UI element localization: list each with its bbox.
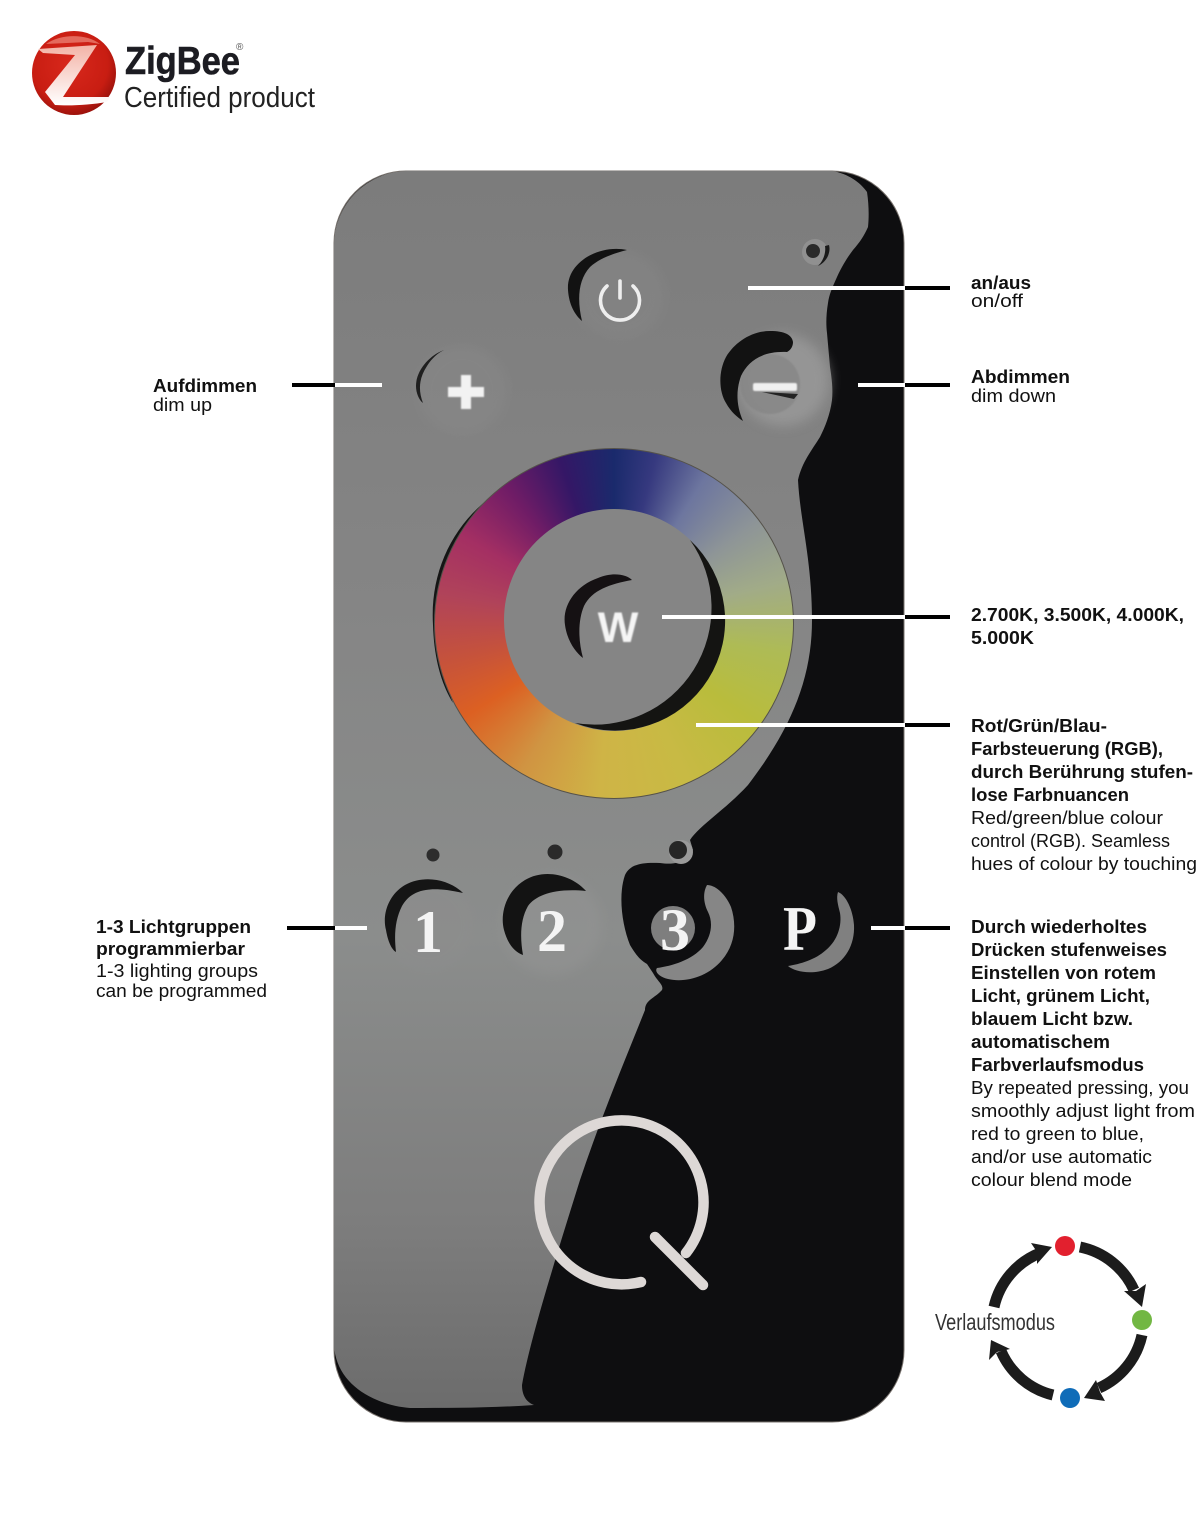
ZigBee wordmark: ZigBee [125,40,240,83]
arrow: green to blue [1084,1335,1142,1401]
centre crescent shadow [575,540,725,731]
label: Abdimmen: dim down [971,386,1056,406]
label: an/aus [971,273,1031,311]
leader line: an/aus [748,286,950,290]
colour ring control [433,448,794,799]
W label: W [598,604,639,652]
plus crescent shadow [416,350,444,403]
leader line: light groups [287,926,367,930]
ring outer shadow [433,500,487,703]
label: RGB colour control: control (RGB). Seamless [971,831,1170,851]
RGB colour wheel [434,448,794,799]
diagram: Verlaufsmodus colour cycle [935,1236,1152,1408]
leader line: colour temperature [662,615,950,619]
minus underside shadow [762,392,798,399]
dot: green [1132,1310,1152,1330]
button: 1: 1 [413,899,443,965]
label: repeated pressing: Licht, grünem Licht, [971,986,1150,1006]
label: Abdimmen [971,367,1070,406]
label: Aufdimmen [153,376,257,415]
label: colour temperatures [971,605,1184,648]
label: colour temperatures: 2.700K, 3.500K, 4.000K, [971,605,1184,625]
registered mark: ® [236,42,244,53]
button: minus [720,331,829,426]
button: 2 [502,874,602,975]
label: repeated pressing: Durch wiederholtes [971,917,1147,937]
icon: minus [753,383,797,391]
label: RGB colour control: durch Berührung stufen- [971,762,1193,782]
label: RGB colour control: Farbsteuerung (RGB), [971,739,1163,759]
button: 3: 3 [660,897,690,963]
label: repeated pressing: blauem Licht bzw. [971,1009,1133,1029]
leader line: P button [871,926,950,930]
device grey reflection [334,171,869,1408]
label: RGB colour control: Red/green/blue colour [971,808,1163,828]
label: RGB colour control: Rot/Grün/Blau- [971,716,1107,736]
dot: red [1055,1236,1075,1256]
label: light groups: 1-3 lighting groups [96,961,258,981]
label: repeated pressing: smoothly adjust light from [971,1101,1195,1121]
label: repeated pressing: and/or use automatic [971,1147,1152,1167]
label: RGB colour control: hues of colour by touching [971,854,1197,874]
label: Abdimmen: Abdimmen [971,367,1070,387]
button: 1 [380,877,476,973]
label: light groups [96,917,267,1001]
label: light groups: programmierbar [96,939,245,959]
label: repeated pressing: Einstellen von rotem [971,963,1156,983]
Verlaufsmodus label: Verlaufsmodus [935,1309,1055,1335]
arrow: blue to left [989,1340,1053,1395]
label: an/aus: an/aus [971,273,1031,293]
remote control device [334,171,904,1422]
dot: blue [1060,1388,1080,1408]
group buttons 1, 2, 3, P [380,874,854,980]
Q brand logo [540,1120,704,1285]
icon: ZigBee red Z sphere [32,31,116,115]
arrow: red to green [1080,1247,1146,1307]
Certified product tagline: Certified product [124,82,315,114]
label: Aufdimmen: dim up [153,395,212,415]
arrow: left to red [994,1243,1052,1307]
label: RGB colour control [971,716,1197,874]
button: 3 [651,885,734,980]
button: P [783,892,854,972]
leader line: Abdimmen [858,383,950,387]
label: an/aus: on/off [971,291,1024,311]
ring centre disc [504,509,724,731]
label: repeated pressing: By repeated pressing, you [971,1078,1189,1098]
leader line: RGB control [696,723,950,727]
W button shadow [565,574,632,658]
button: 2: 2 [537,898,567,964]
label: RGB colour control: lose Farbnuancen [971,785,1129,805]
device black body [334,171,904,1422]
button: plus [416,345,507,435]
label: light groups: 1-3 Lichtgruppen [96,917,251,937]
label: repeated pressing: automatischem [971,1032,1110,1052]
label: Aufdimmen: Aufdimmen [153,376,257,396]
label: repeated pressing: Drücken stufenweises [971,940,1167,960]
button: power [568,249,665,340]
label: repeated pressing [971,917,1195,1190]
label: repeated pressing: Farbverlaufsmodus [971,1055,1144,1075]
power crescent shadow [568,249,627,321]
label: light groups: can be programmed [96,981,267,1001]
label: repeated pressing: red to green to blue, [971,1124,1144,1144]
logo: ZigBee Certified product [32,31,315,115]
button: P: P [783,893,817,964]
icon: plus [448,375,484,409]
icon: power symbol [600,281,640,320]
label: colour temperatures: 5.000K [971,628,1034,648]
indicator LEDs [426,239,830,864]
leader line: Aufdimmen [292,383,382,387]
label: repeated pressing: colour blend mode [971,1170,1132,1190]
minus crescent shadow [720,331,793,421]
